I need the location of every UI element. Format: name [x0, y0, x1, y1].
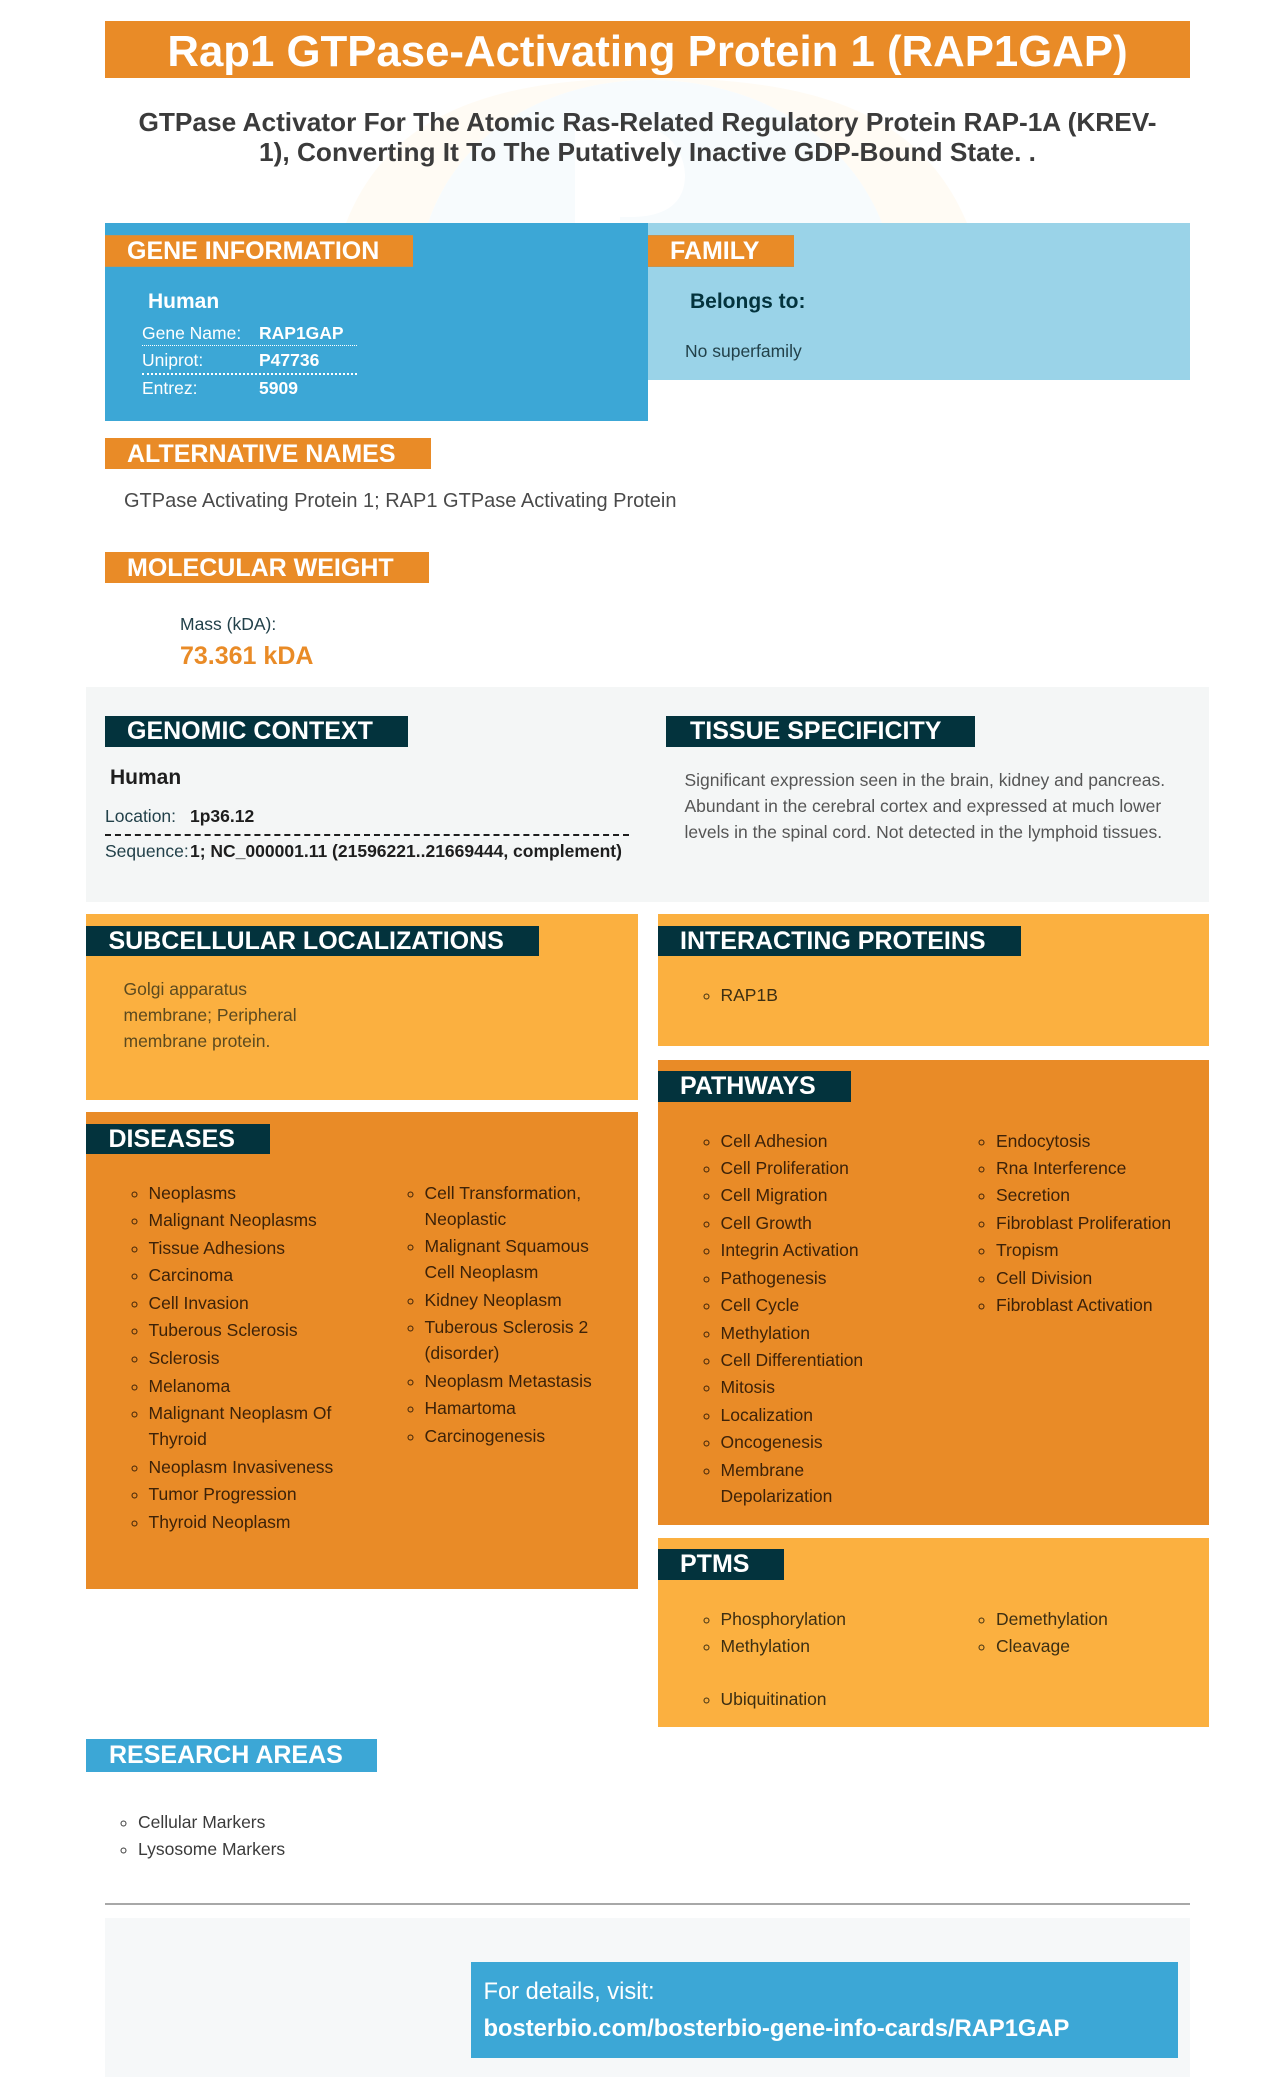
ptms list column 1: Phosphorylation: [720, 1608, 846, 1628]
diseases list column 1: Malignant Neoplasms: [148, 1210, 317, 1230]
panel: genomic context and tissue specificity: [86, 687, 1209, 902]
diseases list column 1: Carcinoma: [148, 1265, 233, 1285]
gene name row: [142, 321, 357, 346]
panel: diseases: [86, 1112, 638, 1589]
panel: family: [648, 223, 1190, 380]
heading: research areas: RESEARCH AREAS: [109, 1741, 343, 1769]
uniprot row: [142, 348, 357, 375]
heading: subcellular localizations: SUBCELLULAR LOCALIZATIONS: [108, 927, 504, 955]
heading: tissue specificity: TISSUE SPECIFICITY: [690, 717, 941, 745]
heading: diseases: [86, 1124, 270, 1154]
tissue specificity text: Abundant in the cerebral cortex and expressed at much lower: [684, 796, 1161, 816]
localization text: membrane; Peripheral: [124, 1004, 297, 1024]
pathways list column 2: Fibroblast Proliferation: [996, 1213, 1171, 1233]
diseases list column 2: Cell Neoplasm: [424, 1262, 538, 1282]
pathways list column 1: Cell Differentiation: [720, 1350, 863, 1370]
pathways list column 1: Oncogenesis: [720, 1432, 823, 1452]
diseases list column 2: Cell Transformation,: [424, 1182, 581, 1202]
heading: family: [648, 235, 794, 267]
diseases list column 1: Cell Invasion: [148, 1293, 249, 1313]
localization text: Golgi apparatus: [124, 978, 247, 998]
sequence row: 1; NC_000001.11 (21596221..21669444, complement): [190, 841, 622, 861]
diseases list column 2: [408, 1182, 592, 1446]
heading: alternative names: ALTERNATIVE NAMES: [127, 440, 396, 468]
diseases list column 2: (disorder): [424, 1343, 499, 1363]
diseases list column 2: Neoplasm Metastasis: [424, 1371, 592, 1391]
tissue specificity text: Significant expression seen in the brain, kidney and pancreas.: [684, 770, 1165, 790]
entrez row: 5909: [259, 378, 298, 398]
species label: Human: [110, 766, 181, 789]
pathways list column 1: Depolarization: [720, 1486, 832, 1506]
diseases list column 1: Neoplasm Invasiveness: [148, 1457, 333, 1477]
uniprot row: Uniprot:: [142, 350, 203, 370]
diseases list column 2: Kidney Neoplasm: [424, 1290, 562, 1310]
heading: interacting proteins: INTERACTING PROTEINS: [680, 927, 986, 955]
localization text: membrane protein.: [124, 1030, 270, 1050]
diseases list column 1: Tuberous Sclerosis: [148, 1320, 298, 1340]
panel: interacting proteins: [658, 914, 1209, 1046]
ptms list column 1: Methylation: [720, 1636, 810, 1656]
callout: details link: [471, 1962, 1178, 2058]
diseases list column 1: Thyroid Neoplasm: [148, 1512, 290, 1532]
research areas list: Lysosome Markers: [138, 1839, 285, 1859]
diseases list column 2: Carcinogenesis: [424, 1426, 545, 1446]
entrez row: Entrez:: [142, 378, 197, 398]
pathways list column 2: Tropism: [996, 1240, 1059, 1260]
ptms list column 2: Demethylation: [996, 1608, 1108, 1628]
pathways list column 1: Cell Migration: [720, 1185, 827, 1205]
pathways list column 1: Cell Proliferation: [720, 1158, 849, 1178]
pathways list column 2: Secretion: [996, 1185, 1070, 1205]
url text: bosterbio.com/bosterbio-gene-info-cards/RAP1GAP: [484, 2014, 1069, 2042]
family text: No superfamily: [685, 341, 802, 361]
sequence row: Sequence:: [105, 841, 189, 861]
localization text: [124, 978, 297, 1050]
pathways list column 2: Fibroblast Activation: [996, 1295, 1153, 1315]
subtitle: GTPase Activator For The Atomic Ras-Related Regulatory Protein RAP-1A (KREV-: [138, 107, 1157, 137]
alternative names text: GTPase Activating Protein 1; RAP1 GTPase Activating Protein: [124, 490, 676, 512]
heading: ptms: [658, 1549, 784, 1580]
gene name row: RAP1GAP: [259, 323, 344, 343]
ptms list column 1: Ubiquitination: [720, 1689, 827, 1709]
pathways list column 2: Endocytosis: [996, 1130, 1090, 1150]
pathways list column 2: Cell Division: [996, 1268, 1092, 1288]
pathways list column 1: Cell Cycle: [720, 1295, 799, 1315]
diseases list column 2: Hamartoma: [424, 1398, 516, 1418]
panel: ptms: [658, 1538, 1209, 1727]
watermark logo arcs: [346, 78, 967, 223]
tissue specificity text: levels in the spinal cord. Not detected in the lymphoid tissues.: [684, 822, 1162, 842]
species label: Human: [148, 290, 219, 312]
pathways list column 1: Cell Growth: [720, 1213, 812, 1233]
mass label: Mass (kDA):: [180, 614, 276, 634]
location row: 1p36.12: [190, 806, 254, 826]
subtitle: [138, 107, 1157, 166]
mass value: 73.361 kDA: [180, 642, 313, 670]
diseases list column 2: Neoplastic: [424, 1208, 506, 1228]
pathways list column 1: Methylation: [720, 1323, 810, 1343]
interacting proteins list: RAP1B: [720, 985, 778, 1005]
pathways list column 1: [704, 1130, 863, 1506]
pathways list column 2: Rna Interference: [996, 1158, 1126, 1178]
ptms list column 2: Cleavage: [996, 1636, 1070, 1656]
panel: subcellular localizations: [86, 914, 638, 1100]
heading: gene information: GENE INFORMATION: [127, 237, 379, 265]
heading: pathways: PATHWAYS: [680, 1072, 816, 1100]
pathways list column 1: Cell Adhesion: [720, 1130, 828, 1150]
subtitle: 1), Converting It To The Putatively Inactive GDP-Bound State. .: [259, 136, 1036, 166]
heading: molecular weight: MOLECULAR WEIGHT: [127, 554, 394, 582]
diseases list column 1: Sclerosis: [148, 1348, 220, 1368]
molecular weight value: [180, 614, 313, 670]
panel: pathways: [658, 1060, 1209, 1525]
tissue specificity text: [684, 770, 1165, 842]
heading: ptms: PTMS: [680, 1550, 749, 1578]
pathways list column 1: Membrane: [720, 1460, 804, 1480]
diseases list column 1: Neoplasms: [148, 1182, 236, 1202]
pathways list column 1: Pathogenesis: [720, 1268, 827, 1288]
ptms list column 2: [978, 1608, 1108, 1656]
location row: Location:: [105, 806, 176, 826]
heading: research areas: [86, 1739, 377, 1772]
uniprot row: P47736: [259, 350, 319, 370]
diseases list column 1: [132, 1182, 333, 1532]
heading: diseases: DISEASES: [108, 1125, 235, 1153]
pathways list column 1: Mitosis: [720, 1377, 775, 1397]
ptms list column 1: [704, 1608, 846, 1709]
research areas list: Cellular Markers: [138, 1812, 265, 1832]
diseases list column 2: Malignant Squamous: [424, 1236, 589, 1256]
diseases list column 1: Tumor Progression: [148, 1484, 297, 1504]
panel: footer: [105, 1918, 1190, 2077]
diseases list column 1: Melanoma: [148, 1376, 230, 1396]
pathways list column 1: Integrin Activation: [720, 1240, 859, 1260]
call to action text: For details, visit:: [484, 1979, 655, 2005]
title banner: Rap1 GTPase-Activating Protein 1 (RAP1GAP): [167, 27, 1128, 76]
diseases list column 2: Tuberous Sclerosis 2: [424, 1317, 588, 1337]
diseases list column 1: Tissue Adhesions: [148, 1238, 285, 1258]
belongs to label: Belongs to:: [690, 290, 806, 312]
heading: family: FAMILY: [670, 237, 759, 265]
panel: gene information: [105, 223, 648, 421]
diseases list column 1: Malignant Neoplasm Of: [148, 1403, 331, 1423]
pathways list column 2: [978, 1130, 1171, 1315]
heading: genomic context: GENOMIC CONTEXT: [127, 717, 373, 745]
heading: pathways: [658, 1071, 851, 1102]
pathways list column 1: Localization: [720, 1405, 813, 1425]
location row: [105, 804, 629, 836]
entrez row: [142, 378, 298, 398]
research areas list: [120, 1812, 285, 1859]
gene name row: Gene Name:: [142, 323, 241, 343]
diseases list column 1: Thyroid: [148, 1429, 207, 1449]
